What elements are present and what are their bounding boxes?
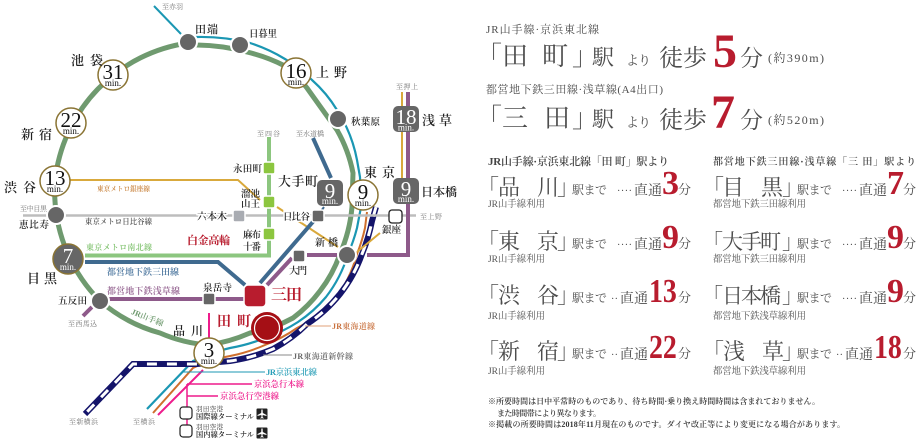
row: Meguro 7 min (702, 165, 916, 210)
row: Nihombashi 9 min: 都営地下鉄浅草線利用 (713, 310, 806, 322)
direction labels: 至上野 (420, 212, 442, 221)
row: Shinjuku 22 min: 「新宿」 (477, 339, 579, 364)
station dots (47, 33, 356, 310)
line name labels (85, 184, 375, 401)
row: Asakusa 18 min: 都営地下鉄浅草線利用 (713, 365, 806, 377)
row: Tokyo 9 min: 分 (678, 236, 691, 251)
line: Hibiya (23, 214, 416, 217)
station: Otemachi 9 min (317, 179, 343, 206)
row: Asakusa 18 min: 直通 (845, 346, 873, 363)
station labels: 永田町 (233, 164, 262, 175)
heading: Mita walking time: 都営地下鉄三田線·浅草線(A4出口) (486, 82, 663, 96)
station: Ueno 16 min: 16 (286, 59, 306, 83)
station labels: 日比谷 (283, 211, 310, 223)
line: Keihin-Tohoku ring (147, 37, 361, 409)
station: Tokyo 9 min (348, 180, 378, 210)
footnotes: ※所要時間は日中平常時のものであり、待ち時間·乗り換え時間時間は含まれておりません。 (488, 396, 820, 406)
station labels: 大門 (289, 265, 307, 277)
highlight labels: 三田 (271, 286, 302, 304)
station labels: 目黒 (27, 271, 58, 286)
station squares (203, 162, 324, 305)
station labels: 田端 (195, 22, 218, 36)
row: Asakusa 18 min: 18 (874, 327, 902, 366)
row: Otemachi 9 min: 駅まで (796, 237, 832, 251)
row: Otemachi 9 min: 分 (903, 236, 916, 251)
station: Mita highlight (244, 285, 266, 307)
station labels: 新橋 (315, 236, 338, 249)
row: Otemachi 9 min (702, 219, 916, 265)
station: Ikebukuro 31 min (98, 60, 128, 90)
station: Ikebukuro 31 min: min. (105, 78, 121, 88)
station: Shibuya 13 min (40, 166, 70, 196)
airport terminals (180, 404, 255, 439)
row: Shinagawa 3 min (477, 165, 691, 210)
row: Otemachi 9 min: 直通 (859, 236, 887, 253)
row: Meguro 7 min: 7 (887, 165, 904, 202)
line: Ginza (70, 92, 402, 252)
station: Shibuya 13 min: min. (47, 184, 63, 194)
row: Tokyo 9 min: JR山手線利用 (488, 253, 545, 265)
heading: Tamachi walking time: 徒歩 (659, 45, 707, 72)
station: Asakusa 18 min: 18 (396, 105, 416, 129)
row: Nihombashi 9 min: 「日本橋」 (702, 284, 803, 308)
station labels: 大手町 (278, 174, 318, 189)
row: Shinjuku 22 min: 駅まで (571, 347, 607, 361)
panel: route map (4, 2, 457, 439)
line name labels: JR東海道線 (332, 321, 375, 331)
row: Shibuya 13 min (477, 271, 691, 322)
row: Shinjuku 22 min (477, 327, 691, 377)
direction labels: 至西馬込 (68, 320, 97, 328)
station labels: 浅草 (422, 113, 452, 128)
row: Shinjuku 22 min: 22 (649, 327, 677, 366)
icon: airplane international (256, 408, 268, 420)
station: Shibuya 13 min: 13 (44, 166, 66, 190)
heading: Mita walking time: 「三田」 (476, 104, 598, 133)
line: Tokaido Shinkansen (85, 207, 376, 414)
line name labels: JR東海道新幹線 (293, 351, 353, 361)
station: Otemachi 9 min: 9 (325, 179, 335, 203)
station labels: 日本橋 (421, 184, 457, 199)
line: Asakusa (83, 92, 408, 316)
station: Meguro 7 min: 7 (63, 244, 73, 268)
icon: airplane domestic (256, 428, 268, 438)
row: Shinagawa 3 min: 駅まで (571, 183, 607, 197)
row: Otemachi 9 min: 都営地下鉄三田線利用 (713, 253, 806, 265)
row: Asakusa 18 min: 駅まで (796, 347, 832, 361)
footnotes (488, 396, 845, 429)
row: Shibuya 13 min: 駅まで (571, 291, 607, 305)
station: Shinagawa 3 min: min. (201, 356, 217, 366)
footnotes: ※掲載の所要時間は2018年11月現在のものです。ダイヤ改正等により変更になる場合があります。 (488, 419, 845, 429)
line: Mita (85, 138, 331, 285)
station: Ginza box (389, 210, 402, 223)
station labels: 上野 (316, 65, 347, 80)
station: Nihombashi 9 min: 9 (401, 177, 411, 201)
station labels: 渋谷 (4, 180, 36, 195)
row: Shibuya 13 min: 13 (649, 271, 677, 310)
station labels: 泉岳寺 (203, 282, 232, 294)
direction labels: 至横浜 (133, 417, 156, 426)
row: Tokyo 9 min: 「東京」 (477, 229, 579, 254)
line: Keihin-Tohoku to Akabane (154, 6, 181, 34)
airport terminals: 羽田空港 (196, 404, 224, 413)
row: Meguro 7 min: 直通 (859, 182, 887, 199)
line name labels: JR山手線 (130, 306, 165, 328)
line name labels: 京浜急行本線 (254, 379, 305, 389)
station labels (4, 22, 457, 338)
row: Tokyo 9 min (477, 219, 691, 265)
row: Otemachi 9 min: 「大手町」 (702, 230, 803, 254)
station labels: 六本木 (197, 210, 227, 223)
line: Shinkansen leader (263, 354, 292, 356)
station labels: 五反田 (58, 296, 87, 307)
row: Tokyo 9 min: 駅まで (571, 237, 607, 251)
row: Shinjuku 22 min: 分 (678, 346, 691, 361)
row: Otemachi 9 min: ···· (842, 240, 857, 251)
row: Meguro 7 min: 「目黒」 (702, 175, 804, 200)
row: Shinagawa 3 min: 分 (678, 182, 691, 197)
station labels: 山王 (241, 198, 260, 210)
direction labels (20, 2, 442, 426)
row: Otemachi 9 min: 9 (887, 219, 904, 256)
station labels: 東京 (364, 165, 395, 180)
highlight labels: 田町 (217, 314, 251, 330)
heading: Tamachi walking time: 分 (740, 46, 763, 71)
row: Nihombashi 9 min: 分 (903, 290, 916, 305)
line name labels: 都営地下鉄浅草線 (107, 285, 180, 296)
row: Meguro 7 min: ···· (842, 186, 857, 197)
row: Shinagawa 3 min: JR山手線利用 (488, 198, 545, 210)
station labels: 銀座 (382, 224, 401, 236)
direction labels: 至赤羽 (162, 2, 183, 11)
station: Ueno 16 min: min. (288, 77, 304, 87)
row: Meguro 7 min: 駅まで (796, 183, 832, 197)
line name labels: JR京浜東北線 (266, 367, 317, 377)
heading: Mita walking time (476, 82, 824, 139)
row: Shinjuku 22 min: JR山手線利用 (488, 365, 545, 377)
row: Nihombashi 9 min: 直通 (859, 290, 887, 307)
row: Shinagawa 3 min: 3 (662, 165, 679, 202)
line: Keihin-Tohoku leader (183, 371, 265, 373)
direction labels: 至中目黒 (20, 204, 48, 213)
direction labels: 至水道橋 (296, 129, 324, 138)
station: Meguro 7 min: min. (60, 262, 76, 272)
row: Shinagawa 3 min: ···· (617, 186, 632, 197)
heading: Tamachi walking time: 「田町」 (476, 42, 598, 71)
line name labels: 東京メトロ銀座線 (97, 184, 150, 193)
row: Shinjuku 22 min: ·· (611, 350, 618, 361)
column heading: from Mita: 都営地下鉄三田線·浅草線「三 田」駅より (713, 155, 916, 168)
line: Tokaido leader (305, 325, 331, 327)
row: Asakusa 18 min: ·· (836, 350, 843, 361)
highlight labels (187, 233, 302, 330)
heading: Tamachi walking time: 駅 (591, 45, 614, 70)
row: Tokyo 9 min: ···· (617, 240, 632, 251)
station: Meguro 7 min (53, 244, 83, 274)
row: Asakusa 18 min: 分 (903, 346, 916, 361)
direction labels: 至四谷 (257, 129, 280, 138)
heading: Tamachi walking time: JR山手線·京浜東北線 (486, 23, 599, 36)
station labels: 池袋 (71, 53, 103, 68)
heading: Mita walking time: 徒歩 (659, 107, 707, 134)
footnotes: また時間帯により異なります。 (497, 408, 601, 418)
line: JR Yamanote ring (55, 43, 353, 345)
station: Nihombashi 9 min (393, 177, 419, 204)
station labels: 日暮里 (249, 28, 277, 40)
heading: Tamachi walking time: より (626, 53, 651, 68)
station labels: 品川 (173, 324, 203, 338)
heading: Mita walking time: 分 (740, 108, 763, 133)
line name labels: 東京メトロ南北線 (86, 242, 152, 252)
direction labels: 至新横浜 (69, 417, 99, 426)
row: Nihombashi 9 min: 9 (887, 273, 904, 310)
row: Shinagawa 3 min: 直通 (634, 182, 662, 199)
station: Asakusa 18 min: min. (398, 122, 414, 132)
station: Nihombashi 9 min: min. (398, 194, 414, 204)
row: Shibuya 13 min: 分 (678, 290, 691, 305)
row: Nihombashi 9 min (702, 273, 916, 322)
station labels: 秋葉原 (351, 116, 380, 128)
station: Shinjuku 22 min: 22 (60, 108, 82, 132)
station: Otemachi 9 min: min. (322, 196, 338, 206)
line name labels: 都営地下鉄三田線 (107, 266, 179, 277)
heading: Mita walking time: (約520m) (768, 113, 824, 127)
station: Tokyo 9 min: 9 (358, 180, 368, 204)
line: Tokaido orange (153, 212, 367, 413)
row: Shibuya 13 min: 「渋谷」 (477, 283, 579, 308)
airport terminals: 国際線ターミナル (196, 412, 255, 421)
line: Namboku (85, 137, 269, 256)
line: Keikyu pink (158, 313, 209, 415)
station labels: 新宿 (21, 127, 52, 142)
station: Tamachi highlight (251, 312, 283, 344)
line: Keikyu branch (187, 384, 252, 425)
station: Shinjuku 22 min: min. (63, 126, 79, 136)
row: Meguro 7 min: 都営地下鉄三田線利用 (713, 198, 806, 210)
station labels: 麻布 (243, 229, 261, 241)
station: Tokyo 9 min: min. (355, 198, 371, 208)
row: Nihombashi 9 min: ···· (842, 294, 857, 305)
row: Tokyo 9 min: 直通 (634, 236, 662, 253)
row: Shinagawa 3 min: 「品川」 (477, 175, 579, 200)
station: Shinagawa 3 min (194, 338, 224, 368)
row: Nihombashi 9 min: 駅まで (796, 291, 832, 305)
direction labels: 至押上 (396, 82, 418, 91)
heading: Mita walking time: 駅 (591, 107, 614, 132)
station: Ikebukuro 31 min: 31 (102, 60, 124, 84)
highlight labels: 白金高輪 (187, 233, 230, 247)
heading: Tamachi walking time: 5 (713, 25, 737, 78)
line name labels: 京浜急行空港線 (220, 391, 280, 401)
station: Shinagawa 3 min: 3 (204, 338, 214, 362)
heading: Mita walking time: より (626, 115, 651, 130)
station labels: 十番 (243, 241, 261, 253)
row: Shibuya 13 min: 直通 (620, 290, 648, 307)
row: Shibuya 13 min: ·· (611, 294, 618, 305)
row: Tokyo 9 min: 9 (662, 219, 679, 256)
row: Shinjuku 22 min: 直通 (620, 346, 648, 363)
airport terminals: 国内線ターミナル (196, 430, 255, 439)
line: Mita link to Otemachi (319, 207, 324, 214)
row: Meguro 7 min: 分 (903, 182, 916, 197)
station labels: 恵比寿 (19, 219, 49, 231)
row: Shibuya 13 min: JR山手線利用 (488, 310, 545, 322)
column heading: from Tamachi: JR山手線·京浜東北線「田 町」駅より (488, 154, 669, 168)
station labels: 溜池 (241, 188, 260, 200)
station: Shinjuku 22 min (56, 108, 86, 138)
row: Asakusa 18 min: 「浅草」 (702, 339, 804, 364)
row: Asakusa 18 min (702, 327, 916, 377)
airport terminals: 羽田空港 (196, 422, 224, 431)
line name labels: 東京メトロ日比谷線 (85, 217, 153, 226)
station: Ueno 16 min (281, 58, 311, 88)
heading: Tamachi walking time (476, 23, 824, 78)
heading: Mita walking time: 7 (711, 86, 735, 139)
heading: Tamachi walking time: (約390m) (768, 51, 824, 65)
